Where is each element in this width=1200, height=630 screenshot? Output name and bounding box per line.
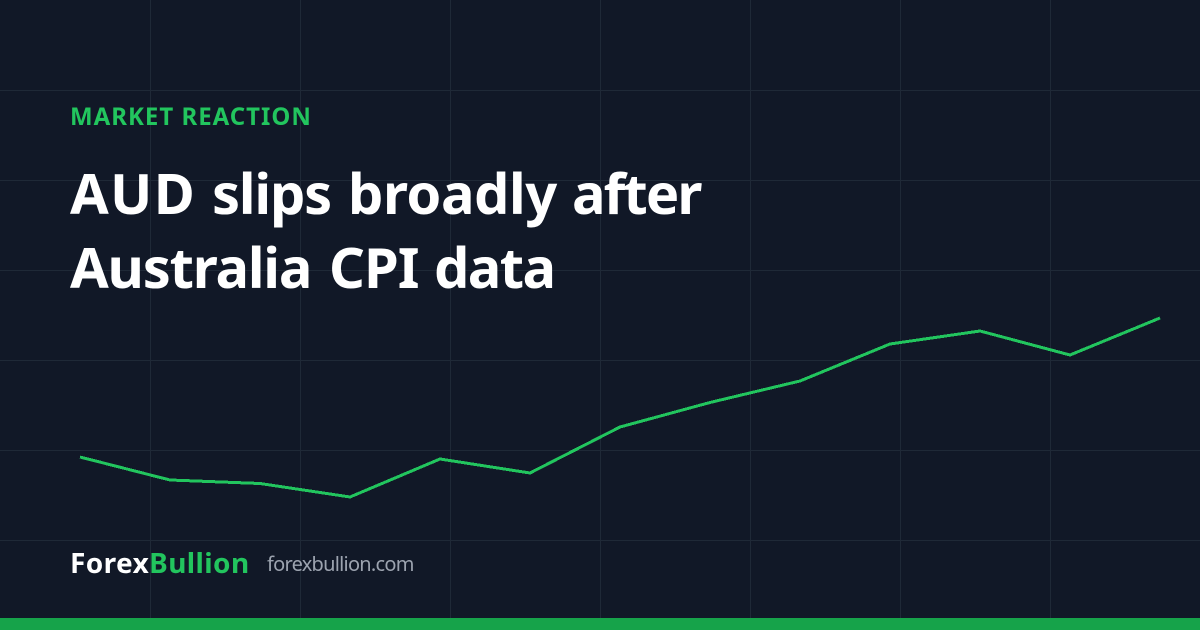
title: AUD <box>70 155 196 231</box>
title: slips <box>212 155 331 231</box>
website url: forexbullion.com <box>267 550 414 577</box>
eyebrow heading: MARKET REACTION <box>70 100 312 133</box>
line chart: price trend <box>80 318 1160 497</box>
title: Australia <box>70 229 311 305</box>
bottom accent bar <box>0 618 1200 630</box>
title: after <box>572 155 700 231</box>
title <box>70 155 702 305</box>
title: broadly <box>348 155 557 231</box>
title: data <box>434 229 554 305</box>
title: CPI <box>329 229 419 305</box>
brand logo text: ForexBullion <box>70 544 250 582</box>
